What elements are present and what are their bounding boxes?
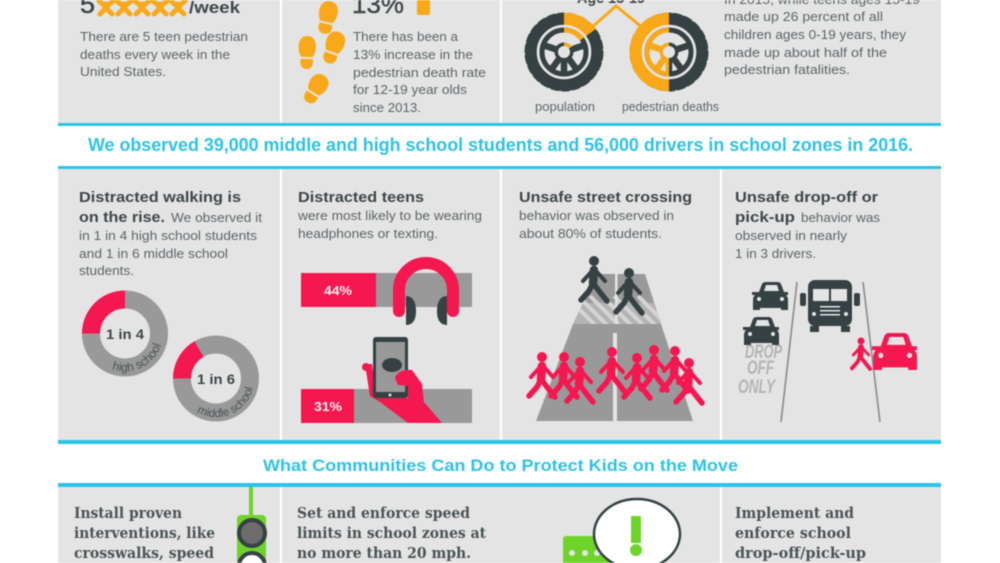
text: crosswalks, speed [74, 544, 214, 562]
icon: students using crosswalk [581, 256, 642, 313]
heading [79, 189, 241, 226]
heading: Distracted teens [298, 189, 424, 206]
description [724, 0, 920, 77]
donut: 1 in 6 middle school: middle school [197, 386, 254, 418]
illustration: road with crosswalk [536, 274, 693, 421]
donut: 1 in 6 middle school: 1 in 6 [197, 371, 235, 387]
bar: texting 31 percent: 31% [314, 399, 342, 414]
panel: unsafe drop-off [722, 169, 941, 440]
description: pedestrian fatalities. [724, 62, 850, 77]
heading: Distracted walking is [79, 189, 241, 206]
description: students. [79, 263, 134, 278]
heading [735, 189, 878, 226]
description [79, 210, 262, 278]
tire labels [535, 99, 719, 114]
description: 1 in 3 drivers. [735, 246, 816, 261]
icon: pedestrian deaths tire [632, 15, 706, 89]
icon: five orange people [99, 1, 185, 14]
bar: texting 31 percent [301, 389, 472, 423]
donut: 1 in 4 high school: 1 in 4 [106, 326, 144, 342]
text [297, 504, 486, 562]
text: Set and enforce speed [297, 504, 470, 522]
description [519, 208, 674, 241]
description: made up 26 percent of all [724, 9, 883, 24]
panel: distracted walking [58, 168, 280, 440]
heading: on the rise. [79, 209, 165, 226]
text: Implement and [735, 504, 854, 522]
description: for 12-19 year olds [353, 82, 468, 97]
panel: five deaths per week [80, 0, 248, 79]
text [74, 504, 215, 562]
description: children ages 0-19 years, they [724, 27, 907, 42]
drop off only road marking: ONLY [738, 377, 777, 398]
description: There are 5 teen pedestrian [80, 29, 248, 44]
description: We observed it [171, 210, 262, 225]
donut: 1 in 6 middle school [172, 335, 260, 422]
heading: pick-up [735, 209, 795, 226]
bar: headphones 44 percent: 44% [324, 283, 352, 298]
panel: distracted teens [282, 169, 500, 440]
icon: child and red car [852, 333, 917, 370]
description: pedestrian death rate [353, 65, 486, 80]
heading: observation summary: We observed 39,000 middle and high school students and 56,000 drivers in school zones in 2016. [88, 135, 913, 155]
description: in 1 in 4 high school students [79, 228, 258, 243]
description: observed in nearly [735, 228, 848, 243]
description: about 80% of students. [519, 226, 662, 241]
description: behavior was [801, 210, 881, 225]
icon: hand holding phone [362, 337, 442, 423]
panel: unsafe street crossing [502, 169, 720, 440]
drop off only road marking: DROP [745, 342, 782, 363]
panel: speed limits [282, 487, 720, 563]
description: were most likely to be wearing [297, 208, 482, 223]
description [353, 29, 486, 115]
donut: 1 in 4 high school: high school [112, 342, 162, 374]
lane lines [781, 282, 880, 422]
text: drop-off/pick-up [735, 544, 866, 562]
text: limits in school zones at [297, 524, 486, 542]
panel: install interventions [58, 487, 280, 563]
text [735, 504, 866, 562]
description: deaths every week in the [80, 47, 230, 62]
donut: 1 in 4 high school [81, 290, 168, 377]
tire labels: pedestrian deaths [622, 99, 719, 114]
panel: drop-off procedures [722, 487, 941, 563]
drop off only road marking: OFF [747, 358, 775, 379]
description [297, 208, 482, 241]
icon: traffic light [237, 487, 266, 563]
text: no more than 20 mph. [297, 544, 471, 562]
text: interventions, like [74, 524, 215, 542]
text: Install proven [74, 504, 182, 522]
icon: message bubbles with alert [563, 499, 680, 563]
bar: headphones 44 percent [301, 273, 472, 307]
description: There has been a [353, 29, 459, 44]
connector lines [590, 6, 643, 29]
drop off only road marking [738, 342, 782, 398]
description: 13% increase in the [353, 47, 473, 62]
icon: population tire [527, 15, 601, 89]
description: headphones or texting. [298, 226, 438, 241]
panel: 13 percent increase [298, 0, 486, 115]
icon: footprints [298, 0, 430, 107]
icon: headphones [399, 263, 453, 325]
icon: students crossing unsafely [529, 345, 702, 403]
icon: dark cars [743, 282, 788, 345]
description: and 1 in 6 middle school [79, 246, 228, 261]
icon: school bus [800, 280, 860, 332]
tire labels: population [535, 99, 595, 114]
description: behavior was observed in [519, 208, 674, 223]
description: made up about half of the [724, 45, 887, 60]
heading: Unsafe drop-off or [735, 189, 878, 206]
description: since 2013. [353, 100, 421, 115]
panel: top row background [58, 0, 941, 123]
text: enforce school [735, 524, 851, 542]
panel: age 15-19 population versus deaths [527, 0, 920, 114]
description [80, 29, 248, 79]
description [735, 210, 881, 261]
heading: what communities can do: What Communities Can Do to Protect Kids on the Move [263, 456, 738, 475]
heading: Unsafe street crossing [519, 189, 692, 206]
description: United States. [80, 64, 166, 79]
